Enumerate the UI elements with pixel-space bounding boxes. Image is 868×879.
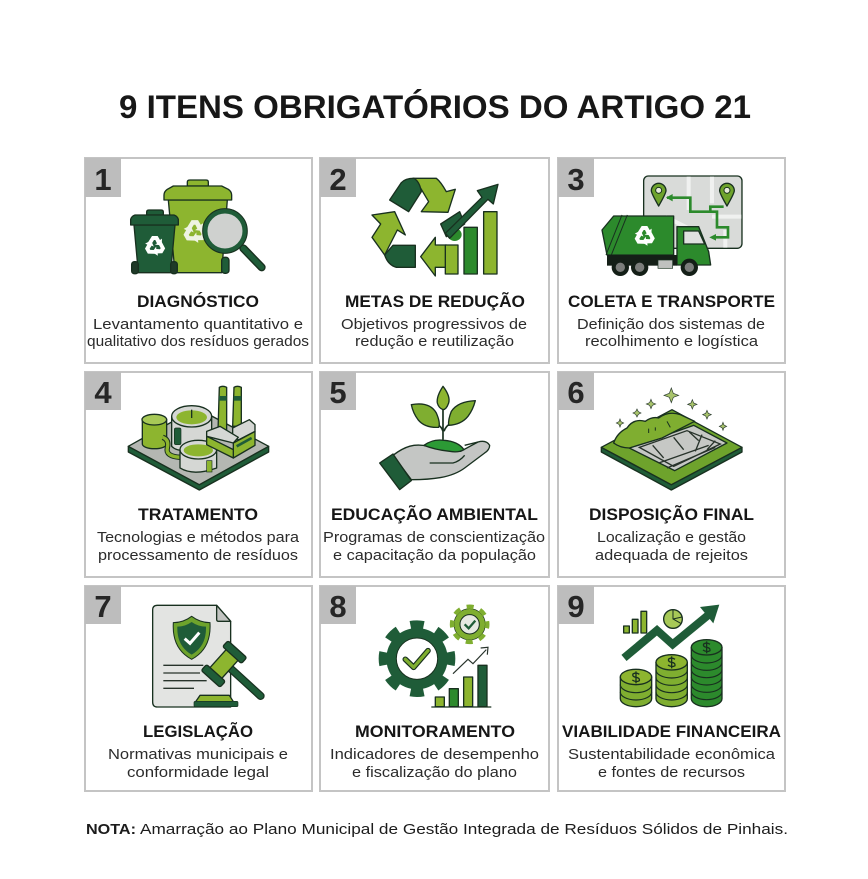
icon: landfill <box>601 388 742 490</box>
title: 9 ITENS OBRIGATÓRIOS DO ARTIGO 21 <box>119 89 751 125</box>
description: e capacitação da população <box>333 547 536 564</box>
footnote: Amarração ao Plano Municipal de Gestão Integrada de Resíduos Sólidos de Pinhais. <box>140 821 788 838</box>
description: e fontes de recursos <box>598 764 745 781</box>
description: Indicadores de desempenho <box>330 746 539 763</box>
description <box>330 746 539 781</box>
description <box>577 316 765 350</box>
heading: MONITORAMENTO <box>355 723 515 741</box>
heading: EDUCAÇÃO AMBIENTAL <box>331 504 538 524</box>
heading: COLETA E TRANSPORTE <box>568 293 775 311</box>
description: processamento de resíduos <box>98 547 298 564</box>
description: e fiscalização do plano <box>352 764 517 781</box>
description: Definição dos sistemas de <box>577 316 765 333</box>
panel: 3 coleta e transporte <box>558 158 785 363</box>
description: qualitativo dos resíduos gerados <box>87 333 309 350</box>
description <box>108 746 288 781</box>
description <box>97 529 300 564</box>
description: Localização e gestão <box>597 529 746 546</box>
footnote: NOTA: <box>86 821 136 838</box>
icon: recycling bins and magnifier <box>131 180 262 274</box>
number 4: 4 <box>94 375 112 410</box>
panel: 8 monitoramento <box>320 586 549 791</box>
number 5: 5 <box>329 375 347 410</box>
panel: 9 viabilidade financeira <box>558 586 785 791</box>
heading: TRATAMENTO <box>138 506 258 524</box>
number 7: 7 <box>94 589 112 624</box>
description: Objetivos progressivos de <box>341 316 527 333</box>
description: redução e reutilização <box>355 333 514 350</box>
icon: coin stacks and rising arrow <box>620 605 722 707</box>
description <box>595 529 748 564</box>
icon: gears, check and rising chart <box>377 604 491 707</box>
icon: garbage truck and route map <box>602 176 742 274</box>
panel: 1 diagnóstico <box>85 158 312 363</box>
number 8: 8 <box>329 589 347 624</box>
panel: 4 tratamento <box>85 372 312 577</box>
panel: 2 metas de redução <box>320 158 549 363</box>
description <box>323 529 545 564</box>
heading: VIABILIDADE FINANCEIRA <box>562 723 781 741</box>
description: conformidade legal <box>127 764 269 781</box>
panel: 7 legislação <box>85 586 312 791</box>
number 3: 3 <box>567 162 585 197</box>
panel: 5 educação ambiental <box>320 372 549 577</box>
description <box>341 316 527 350</box>
description: Levantamento quantitativo e <box>93 316 303 333</box>
description: Sustentabilidade econômica <box>568 746 776 763</box>
number 1: 1 <box>94 162 112 197</box>
description: Normativas municipais e <box>108 746 288 763</box>
number 2: 2 <box>329 162 347 197</box>
icon: hand holding seedling <box>380 386 490 490</box>
description: Tecnologias e métodos para <box>97 529 300 546</box>
heading: METAS DE REDUÇÃO <box>345 291 525 311</box>
heading: LEGISLAÇÃO <box>143 721 253 741</box>
number 6: 6 <box>567 375 585 410</box>
icon: recycling arrows and growth bars <box>372 178 498 276</box>
icon: document, shield and gavel <box>153 605 261 707</box>
panel: 6 disposição final <box>558 372 785 577</box>
description <box>87 316 309 350</box>
number 9: 9 <box>567 589 585 624</box>
heading: DISPOSIÇÃO FINAL <box>589 504 754 524</box>
description <box>568 746 776 781</box>
description: recolhimento e logística <box>585 333 759 350</box>
icon: treatment plant <box>128 386 269 490</box>
description: adequada de rejeitos <box>595 547 748 564</box>
description: Programas de conscientização <box>323 529 545 546</box>
heading: DIAGNÓSTICO <box>137 292 259 311</box>
